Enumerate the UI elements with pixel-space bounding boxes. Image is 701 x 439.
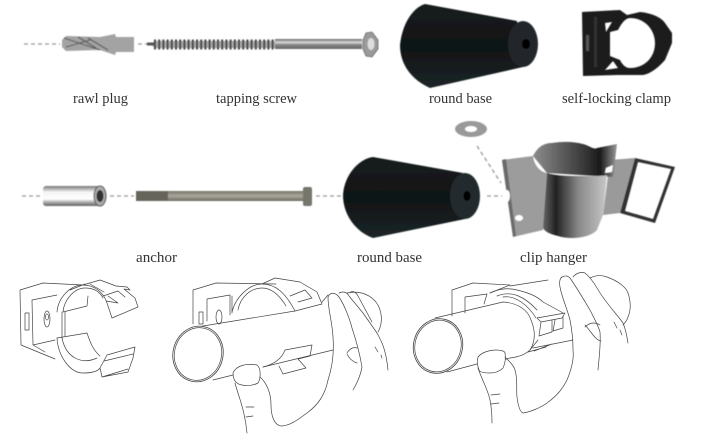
- washer: [455, 121, 487, 137]
- clip hanger: [477, 142, 675, 238]
- label: clip hanger: clip hanger: [520, 250, 587, 266]
- line drawing: hand fitting tube into clamp: [167, 278, 388, 433]
- line drawing: open clamp: [20, 280, 138, 377]
- round base, top row: [400, 4, 538, 88]
- label: tapping screw: tapping screw: [216, 91, 297, 107]
- label: round base, top row: round base: [429, 91, 492, 107]
- line drawing: clamp closed on tube: [407, 272, 630, 423]
- label: self-locking clamp: self-locking clamp: [562, 91, 671, 107]
- label: round base, second row: round base: [357, 250, 422, 266]
- label: anchor: anchor: [136, 250, 177, 266]
- anchor: [22, 186, 134, 206]
- tapping screw: [138, 32, 378, 57]
- round base, second row: [343, 157, 480, 238]
- self-locking clamp: [582, 10, 672, 76]
- label: rawl plug: rawl plug: [73, 91, 128, 107]
- bolt: [136, 187, 342, 206]
- rawl plug: [24, 34, 134, 55]
